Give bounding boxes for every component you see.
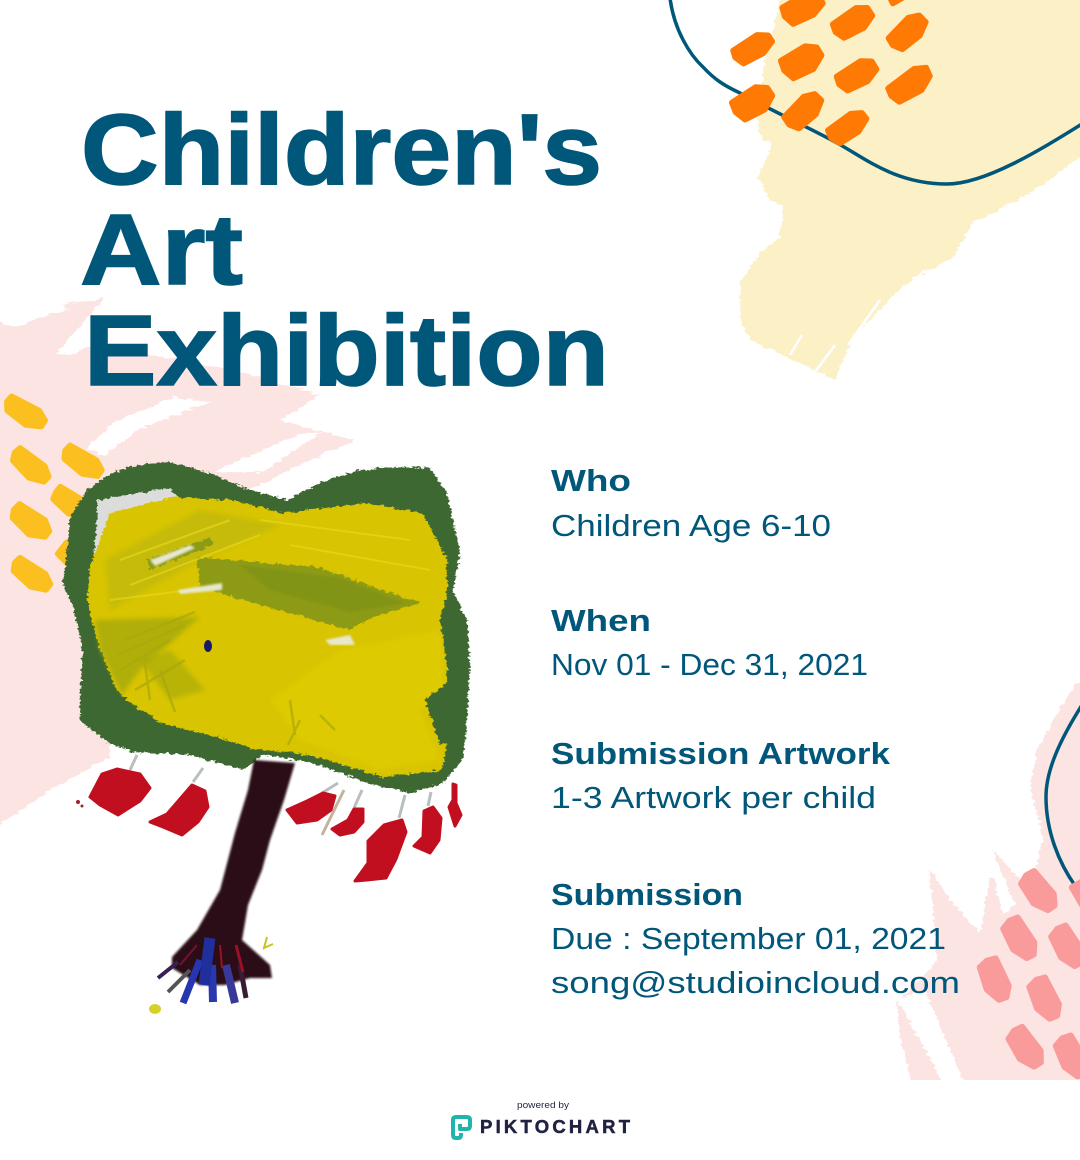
icon: piktochart logo bbox=[453, 1117, 470, 1138]
title: Children's bbox=[81, 94, 602, 206]
info block: submission due bbox=[551, 877, 960, 1000]
title bbox=[80, 94, 609, 407]
brush stroke: pink lower right bbox=[897, 680, 1080, 1090]
info block: submission artwork: 1-3 Artwork per child bbox=[551, 780, 876, 815]
paint specks bbox=[76, 800, 273, 1014]
info block: who: Children Age 6-10 bbox=[551, 508, 831, 543]
tree trunk and roots bbox=[158, 760, 295, 1003]
info block: who bbox=[551, 463, 831, 543]
info block: submission due: Due : September 01, 2021 bbox=[551, 921, 946, 956]
brush stroke: cream top right bbox=[740, 0, 1080, 380]
info block: when: When bbox=[551, 603, 651, 638]
title: Exhibition bbox=[84, 295, 609, 407]
curved line: top right bbox=[670, 0, 1080, 184]
info block: when bbox=[551, 603, 868, 682]
info block: who: Who bbox=[551, 463, 631, 498]
title: Art bbox=[80, 194, 243, 306]
footer: powered by piktochart: powered by bbox=[517, 1100, 569, 1111]
red fruit bbox=[90, 769, 461, 881]
branch stems bbox=[130, 755, 431, 835]
pink brush dabs bbox=[977, 868, 1080, 1080]
info block: submission due: Submission bbox=[551, 877, 743, 912]
painting: child's tree artwork bbox=[63, 462, 470, 1014]
tree canopy bbox=[63, 462, 470, 793]
yellow brush dabs bbox=[2, 393, 105, 595]
info block: submission due: song@studioincloud.com bbox=[551, 965, 960, 1000]
footer: powered by piktochart bbox=[453, 1100, 631, 1138]
footer: powered by piktochart: PIKTOCHART bbox=[480, 1116, 631, 1137]
orange brush dabs bbox=[730, 0, 935, 146]
brush stroke: pink left bbox=[0, 298, 355, 832]
info block: submission artwork bbox=[551, 736, 891, 815]
info block: submission artwork: Submission Artwork bbox=[551, 736, 891, 771]
info block: when: Nov 01 - Dec 31, 2021 bbox=[551, 647, 868, 682]
curved line: right bbox=[1046, 705, 1080, 887]
